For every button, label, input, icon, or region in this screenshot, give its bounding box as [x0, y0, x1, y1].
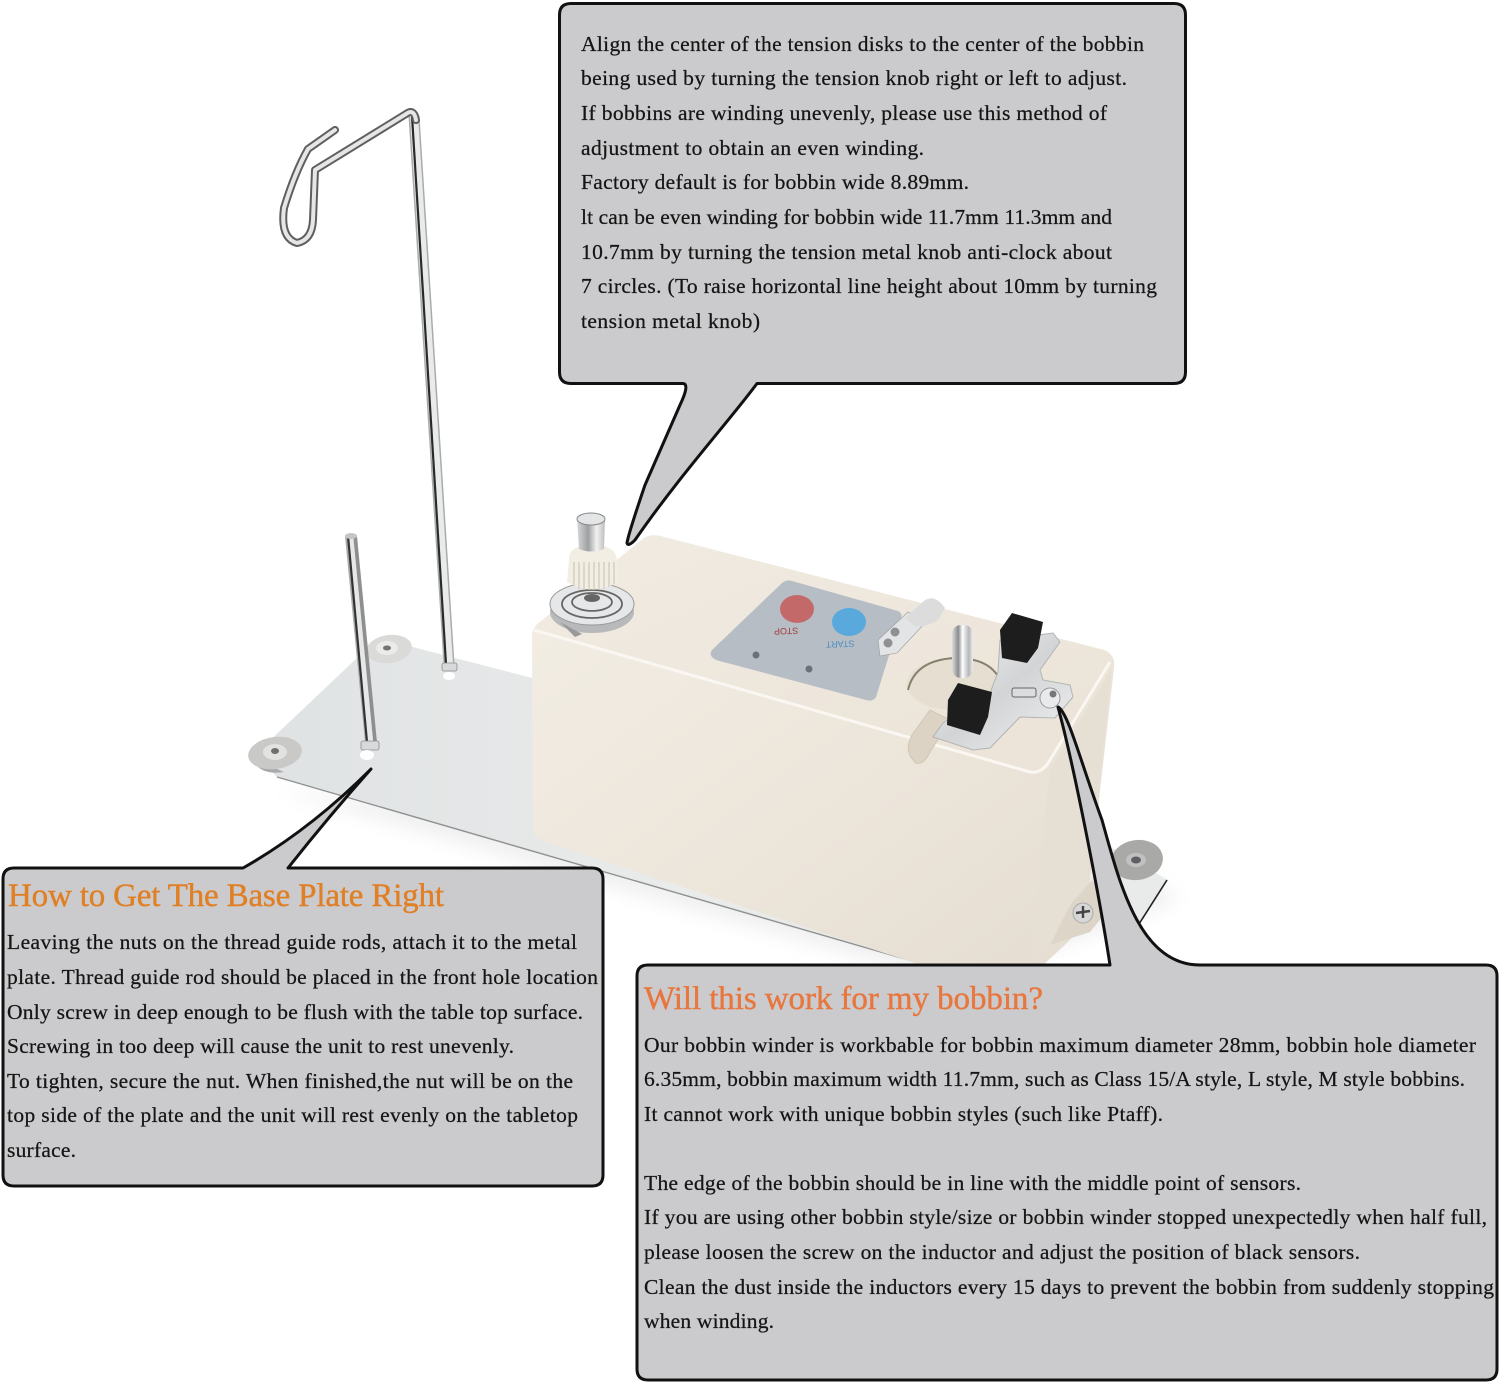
callout text: The edge of the bobbin should be in line with the middle point of sensors. — [644, 1171, 1301, 1195]
thread guide rods — [283, 112, 457, 760]
tension assembly knob — [550, 513, 634, 637]
callout text: being used by turning the tension knob right or left to adjust. — [581, 66, 1127, 90]
callout text: tension metal knob) — [581, 309, 760, 333]
rubber feet washers — [246, 632, 1166, 883]
callout text: If bobbins are winding unevenly, please use this method of — [581, 101, 1108, 125]
callout text: It cannot work with unique bobbin styles (such like Ptaff). — [644, 1102, 1163, 1126]
callout text: 10.7mm by turning the tension metal knob anti-clock about — [581, 240, 1112, 264]
STOP label: STOP — [774, 626, 798, 636]
hook — [283, 112, 416, 243]
callout shape — [3, 769, 603, 1186]
callout text: top side of the plate and the unit will rest evenly on the tabletop — [7, 1103, 578, 1127]
callout text — [644, 1033, 1494, 1333]
callout text: Our bobbin winder is workbable for bobbin maximum diameter 28mm, bobbin hole diameter — [644, 1033, 1476, 1057]
callout text: Leaving the nuts on the thread guide rods, attach it to the metal — [7, 930, 577, 954]
callout text: lt can be even winding for bobbin wide 11.7mm 11.3mm and — [581, 205, 1112, 229]
callout text: when winding. — [644, 1309, 774, 1333]
adjustment screw — [1040, 688, 1060, 708]
callout text: 6.35mm, bobbin maximum width 11.7mm, such as Class 15/A style, L style, M style bobbins. — [644, 1067, 1465, 1091]
callout text: Factory default is for bobbin wide 8.89mm. — [581, 170, 969, 194]
mounting screw — [1073, 903, 1093, 923]
sensor mounting plate — [933, 633, 1073, 750]
callout: tension adjustment — [560, 4, 1186, 544]
callout text: 7 circles. (To raise horizontal line height about 10mm by turning — [581, 274, 1157, 298]
callout text — [581, 32, 1157, 333]
callout text: plate. Thread guide rod should be placed in the front hole location — [7, 965, 598, 989]
base plate — [252, 638, 1180, 985]
black sensors — [947, 613, 1043, 735]
bobbin spindle and slot — [907, 625, 1000, 763]
callout shape — [637, 707, 1497, 1380]
callout text: Screwing in too deep will cause the unit to rest unevenly. — [7, 1034, 514, 1058]
heading: How to Get The Base Plate Right — [8, 878, 444, 914]
callout: bobbin compatibility — [637, 707, 1497, 1380]
control panel — [711, 580, 902, 701]
START label: START — [825, 639, 855, 650]
heading: Will this work for my bobbin? — [644, 981, 1043, 1017]
callout text: adjustment to obtain an even winding. — [581, 136, 924, 160]
callout text: Align the center of the tension disks to the center of the bobbin — [581, 32, 1144, 56]
callout text — [7, 930, 598, 1162]
product illustration: bobbin winder — [246, 112, 1180, 985]
callout: base plate — [3, 769, 603, 1186]
callout shape — [560, 4, 1186, 544]
callout text: please loosen the screw on the inductor and adjust the position of black sensors. — [644, 1240, 1360, 1264]
metal clip — [878, 598, 945, 656]
callout text: To tighten, secure the nut. When finished,the nut will be on the — [7, 1069, 573, 1093]
callout text: Only screw in deep enough to be flush with the table top surface. — [7, 1000, 583, 1024]
winder body — [532, 535, 1114, 968]
callout text: Clean the dust inside the inductors every 15 days to prevent the bobbin from suddenly stopping — [644, 1275, 1494, 1299]
callout text: If you are using other bobbin style/size or bobbin winder stopped unexpectedly when half full, — [644, 1205, 1487, 1229]
callout text: surface. — [7, 1138, 76, 1162]
